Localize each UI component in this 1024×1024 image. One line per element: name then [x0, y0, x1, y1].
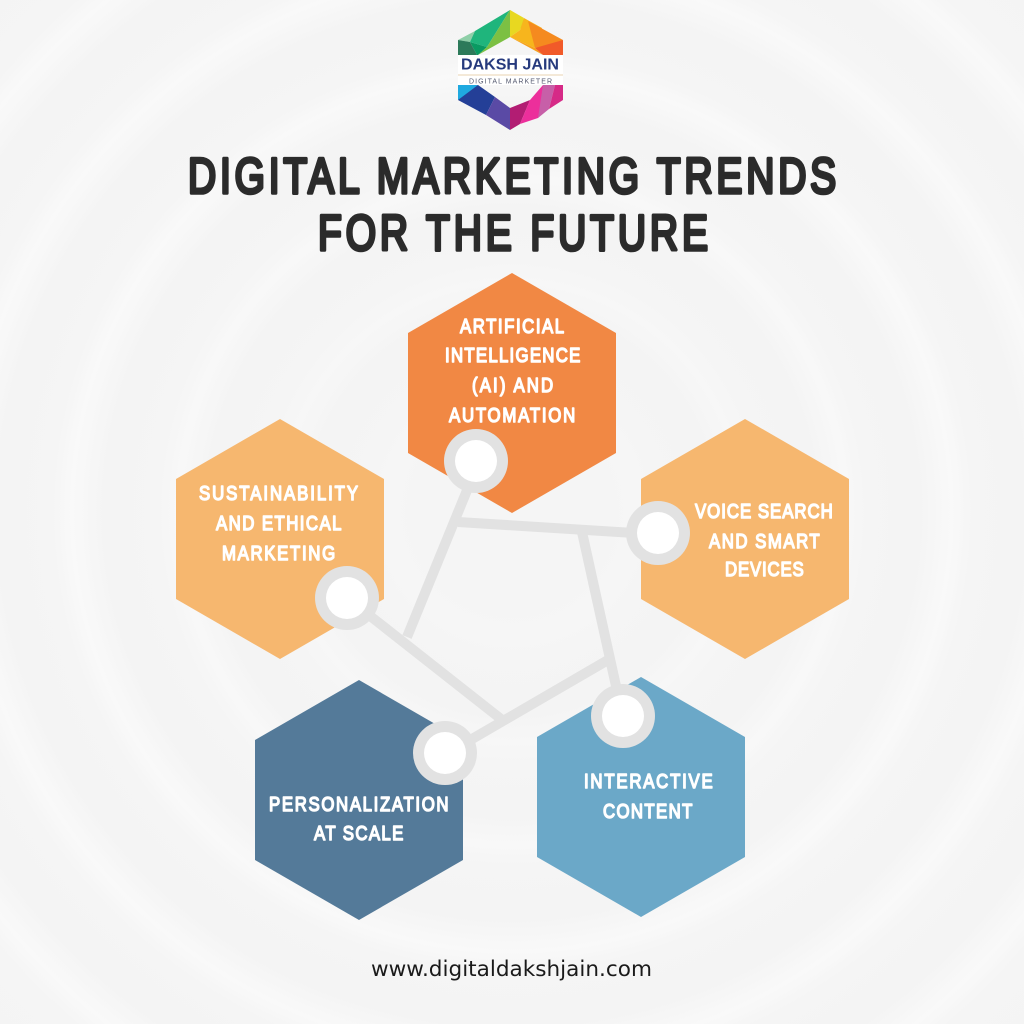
- node: personalization: [413, 721, 477, 785]
- logo name: DAKSH JAIN: [461, 56, 559, 74]
- logo tagline: DIGITAL MARKETER: [469, 78, 552, 86]
- hexagon: sustainability: [176, 419, 384, 659]
- hexagon: sustainability: AND ETHICAL: [216, 511, 341, 534]
- hexagon: interactive content: [537, 677, 745, 917]
- logo: Daksh Jain: [458, 10, 563, 130]
- hexagon: personalization: PERSONALIZATION: [269, 792, 449, 815]
- title: DIGITAL MARKETING TRENDS: [188, 147, 836, 204]
- logo band: [458, 55, 563, 85]
- hexagon: voice search: [641, 419, 849, 659]
- hexagon: artificial intelligence: [408, 273, 616, 513]
- hexagon: interactive content: CONTENT: [603, 799, 693, 822]
- node: artificial intelligence: [444, 429, 508, 493]
- hexagon: artificial intelligence: AUTOMATION: [449, 403, 575, 426]
- logo rule: [458, 74, 563, 76]
- node: sustainability: [315, 566, 379, 630]
- hexagon: artificial intelligence: ARTIFICIAL: [460, 314, 564, 337]
- hexagon: sustainability: SUSTAINABILITY: [199, 481, 359, 504]
- hexagon: personalization: [255, 680, 463, 920]
- title: FOR THE FUTURE: [318, 204, 708, 261]
- hexagon: personalization: AT SCALE: [314, 821, 403, 844]
- connector star lines: [360, 483, 650, 746]
- hexagon: sustainability: MARKETING: [222, 541, 335, 564]
- logo bottom facets: [458, 85, 563, 130]
- website url: www.digitaldakshjain.com: [371, 957, 652, 981]
- node: interactive content: [591, 684, 655, 748]
- hexagon: voice search: DEVICES: [725, 557, 804, 580]
- title: [188, 147, 836, 261]
- node: voice search: [626, 501, 690, 565]
- hexagon: artificial intelligence: INTELLIGENCE: [445, 343, 580, 366]
- logo top facets: [458, 10, 563, 55]
- hexagon: voice search: AND SMART: [709, 529, 820, 552]
- hexagon: artificial intelligence: (AI) AND: [472, 373, 553, 396]
- hexagon: interactive content: INTERACTIVE: [584, 769, 713, 792]
- hexagon: voice search: VOICE SEARCH: [695, 499, 833, 522]
